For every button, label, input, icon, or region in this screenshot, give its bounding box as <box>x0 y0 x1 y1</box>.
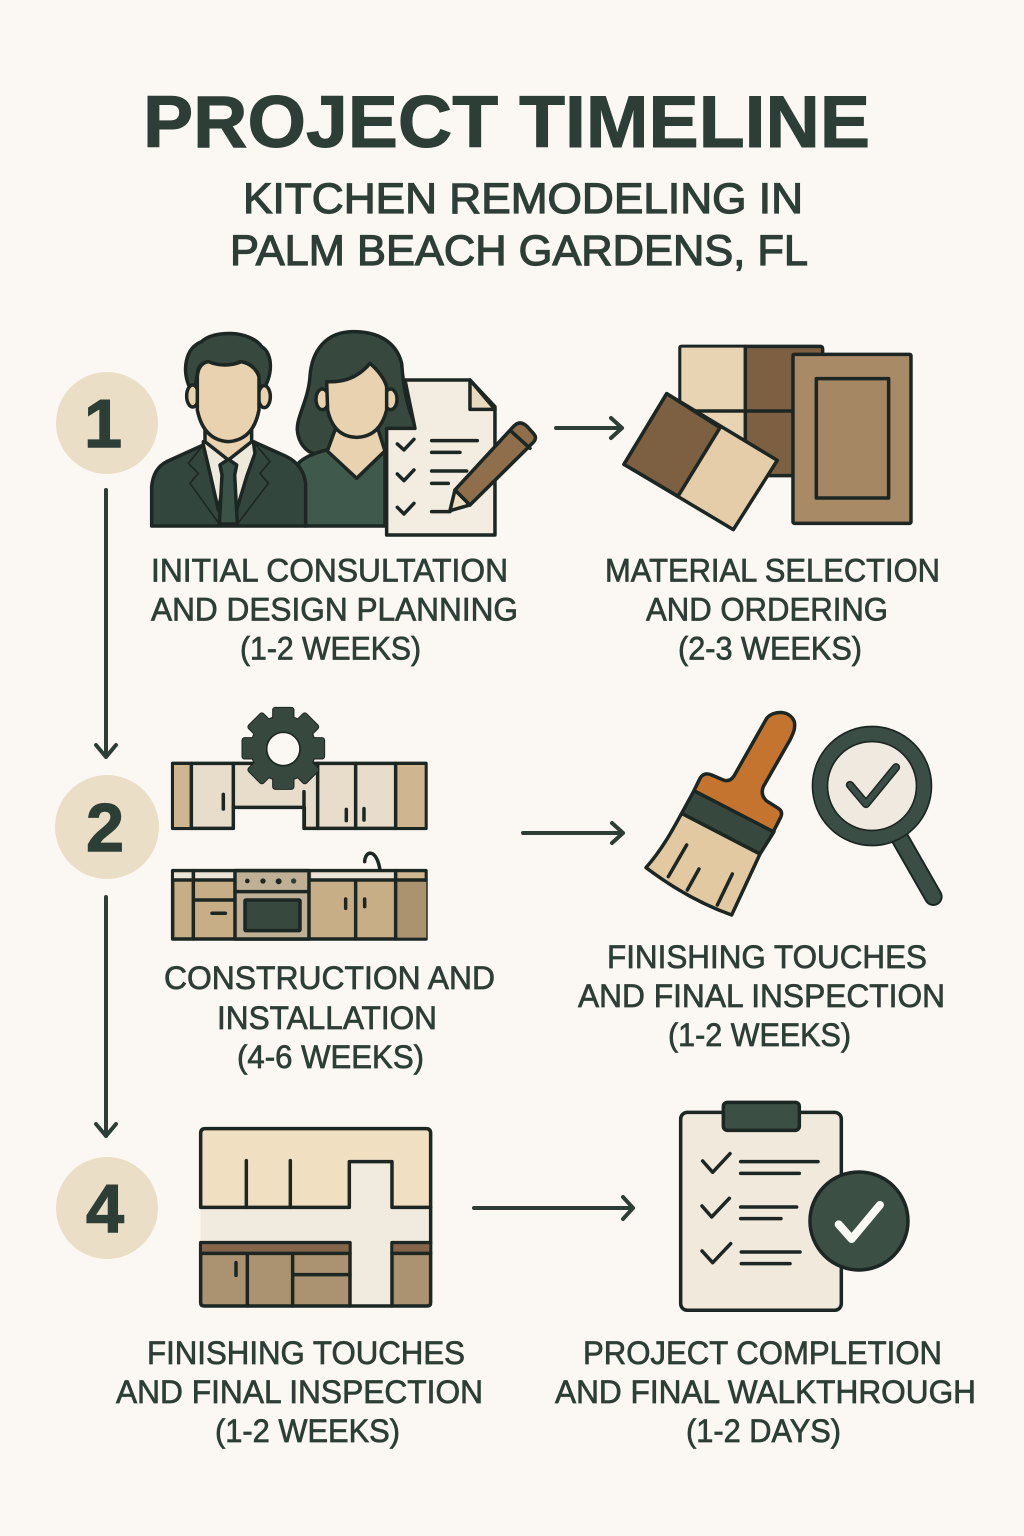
woman ears <box>316 389 329 410</box>
label: initial consultation: INITIAL CONSULTATION <box>151 552 508 588</box>
icon: kitchen construction <box>173 707 426 939</box>
badge check <box>839 1205 880 1239</box>
man neck <box>205 430 252 460</box>
arrow: step 1 down to step 2 <box>96 490 116 757</box>
label: construction <box>164 960 495 1075</box>
label: initial consultation: (1-2 WEEKS) <box>240 630 421 666</box>
door panel <box>793 354 911 523</box>
label: finishing touches lower <box>116 1335 483 1449</box>
man hair <box>186 333 270 392</box>
label: construction: CONSTRUCTION AND <box>164 960 495 996</box>
step badge 1: 1 <box>84 386 122 462</box>
lower cabinets left <box>201 1243 350 1306</box>
icon: clipboard checklist <box>681 1102 908 1310</box>
man shirt <box>203 442 255 510</box>
floor edge <box>350 1207 431 1306</box>
label: finishing touches upper: AND FINAL INSPECTION <box>578 978 945 1014</box>
document <box>387 380 495 535</box>
label: project completion: PROJECT COMPLETION <box>583 1335 942 1371</box>
clip <box>723 1102 799 1130</box>
ferrule <box>682 791 774 854</box>
lower cabinets right <box>392 1243 431 1306</box>
check badge <box>810 1172 908 1270</box>
label: finishing touches upper <box>578 939 945 1053</box>
label: initial consultation <box>151 552 518 666</box>
icon: consultation people and document <box>152 332 535 535</box>
woman neck <box>327 430 385 478</box>
man body <box>152 442 306 526</box>
subtitle: PALM BEACH GARDENS, FL <box>230 227 808 275</box>
upper cabinets <box>201 1129 431 1207</box>
icon: paint brush <box>646 712 795 915</box>
woman face <box>327 363 387 437</box>
check <box>850 767 896 804</box>
step badge 1 <box>56 372 158 474</box>
oven <box>235 871 309 939</box>
icon: magnifier with check <box>820 734 933 897</box>
title: PROJECT TIMELINE <box>143 82 870 163</box>
arrow: finishing to completion <box>474 1197 633 1219</box>
icon: material samples <box>624 346 911 530</box>
woman body <box>298 450 385 526</box>
handle <box>694 712 795 832</box>
checks and lines <box>702 1154 818 1264</box>
step badge 2 <box>55 775 159 879</box>
label: project completion: AND FINAL WALKTHROUGH <box>555 1374 976 1410</box>
subtitle: KITCHEN REMODELING IN <box>243 175 803 223</box>
upper cabinets <box>173 763 426 828</box>
handle <box>900 838 933 897</box>
man face <box>197 362 259 442</box>
arrow: step 2 down to step 4 <box>96 897 116 1136</box>
label: material selection: AND ORDERING <box>646 592 888 628</box>
label: finishing touches lower: AND FINAL INSPECTION <box>116 1374 483 1410</box>
icon: pencil <box>450 423 535 511</box>
lower cabinets <box>173 871 426 939</box>
man ears <box>187 385 199 407</box>
label: initial consultation: AND DESIGN PLANNING <box>151 592 518 628</box>
label: material selection: (2-3 WEEKS) <box>678 630 862 666</box>
label: material selection: MATERIAL SELECTION <box>605 552 940 588</box>
step badge 2: 2 <box>86 790 124 866</box>
document fold <box>470 380 495 409</box>
sample board <box>680 346 823 476</box>
label: project completion: (1-2 DAYS) <box>686 1413 841 1449</box>
subtitle <box>230 175 808 275</box>
step badge 4 <box>56 1157 158 1259</box>
icon: gear <box>242 707 325 789</box>
woman hair <box>297 332 417 453</box>
man lapels <box>188 442 270 525</box>
label: finishing touches upper: FINISHING TOUCHES <box>607 939 927 975</box>
faucet <box>365 853 380 870</box>
label: construction: (4-6 WEEKS) <box>237 1039 424 1075</box>
lens <box>820 734 924 838</box>
step badge 4: 4 <box>86 1171 124 1247</box>
label: finishing touches lower: FINISHING TOUCHES <box>147 1335 465 1371</box>
bristles <box>646 813 760 915</box>
arrow: construction to finishing <box>523 823 623 843</box>
label: project completion <box>555 1335 976 1449</box>
arrow: consultation to materials <box>556 418 622 438</box>
icon: finished kitchen <box>201 1129 431 1307</box>
tilted swatch <box>624 394 777 530</box>
label: finishing touches upper: (1-2 WEEKS) <box>668 1017 851 1053</box>
label: material selection <box>605 552 940 666</box>
label: finishing touches lower: (1-2 WEEKS) <box>215 1413 400 1449</box>
wall <box>201 1162 430 1307</box>
checklist <box>397 439 477 514</box>
label: construction: INSTALLATION <box>217 1000 437 1036</box>
man tie <box>219 459 237 524</box>
board <box>681 1112 841 1310</box>
